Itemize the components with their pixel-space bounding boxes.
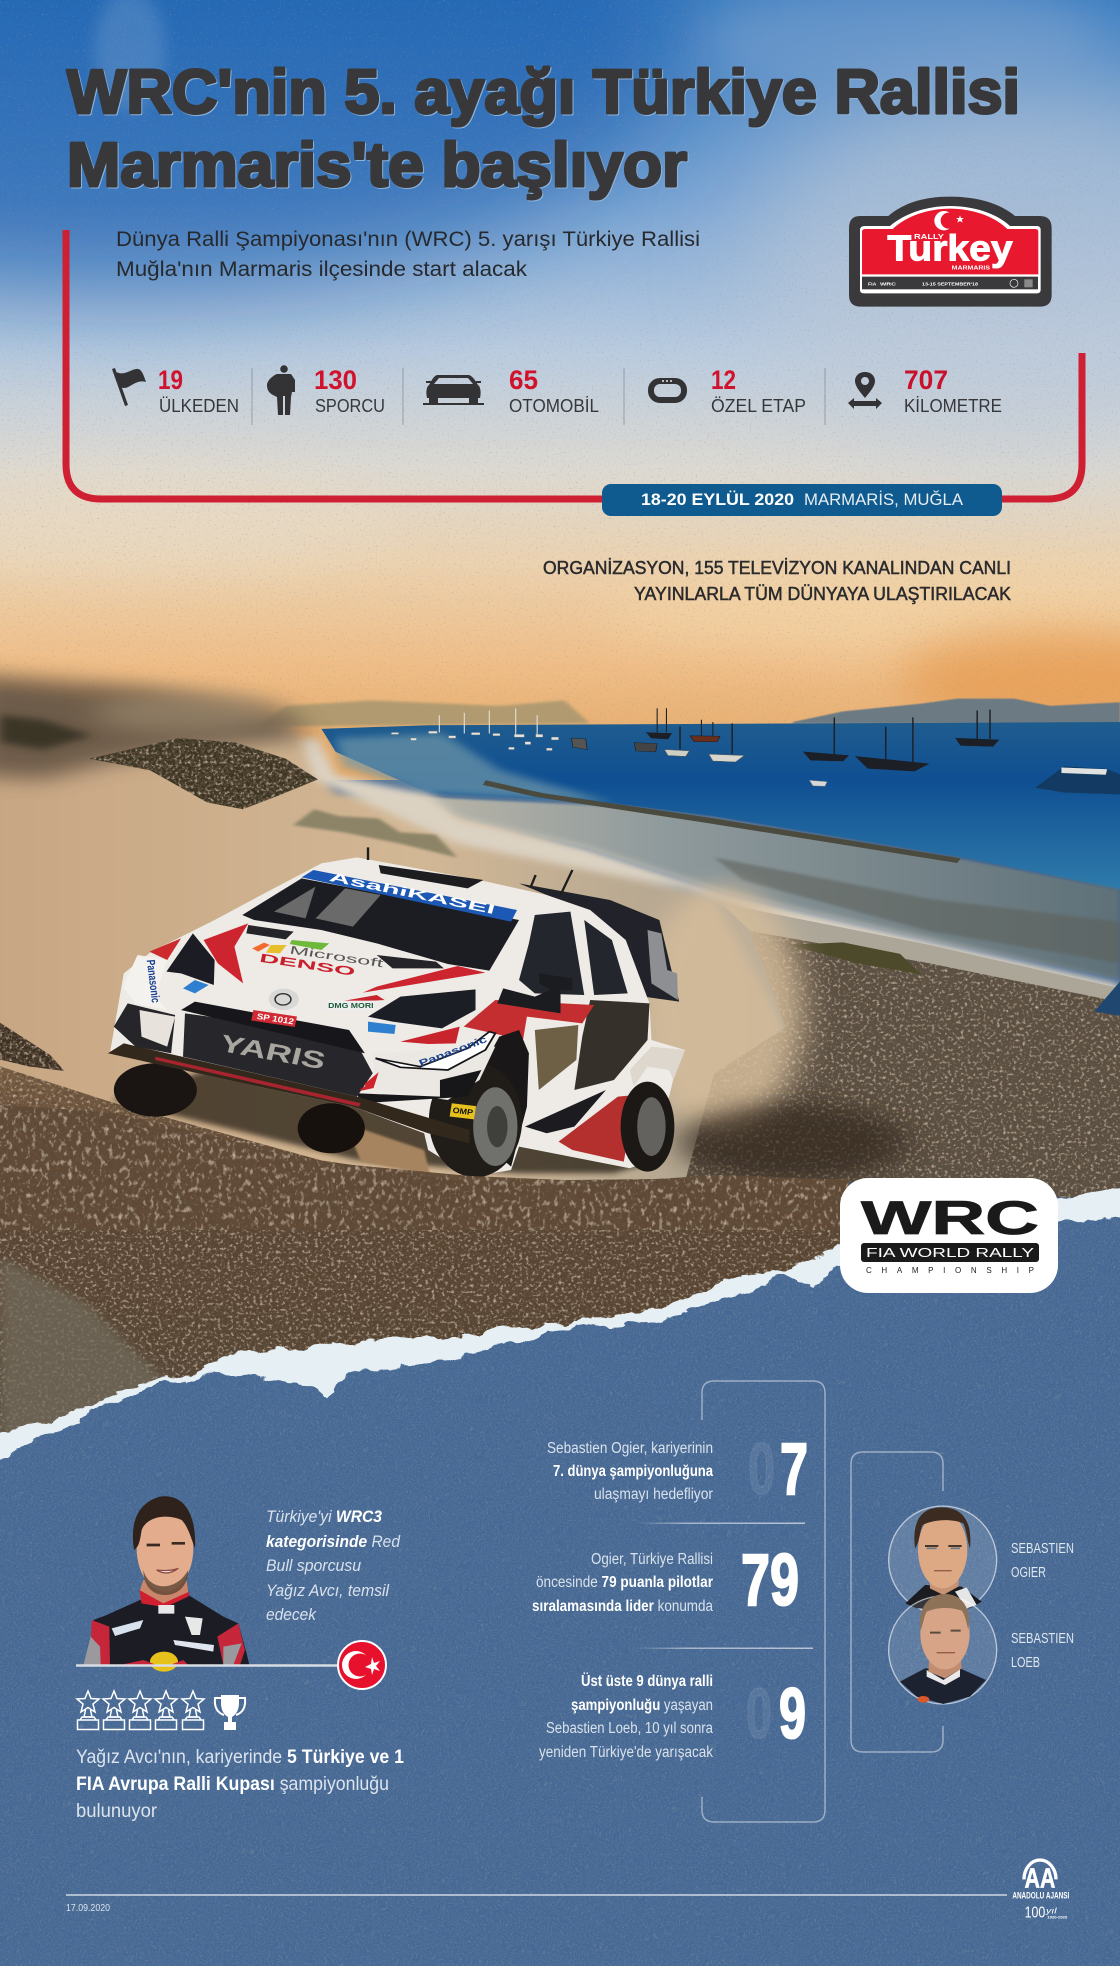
stat: 12 özel etap: 12: [711, 365, 736, 395]
OMP: OMP: [452, 1106, 474, 1117]
footer rule: [66, 1894, 1007, 1896]
Avcı career text: FIA Avrupa Ralli Kupası şampiyonluğu: [76, 1774, 389, 1795]
stat: 19 ülkeden: ÜLKEDEN: [159, 396, 239, 416]
red side sill: [559, 1095, 636, 1162]
background: sunset sky: [0, 0, 1120, 780]
far-side wheel: [298, 1103, 365, 1153]
block: 7 titles: [547, 1440, 713, 1503]
toyota badge: [269, 989, 299, 1010]
blue sponsor chips: [183, 980, 396, 1034]
bonnet vents: [246, 925, 444, 968]
stat: 12 özel etap: ÖZEL ETAP: [711, 396, 806, 416]
block: 9 titles: [539, 1673, 713, 1761]
light pebbles: [721, 903, 1120, 1002]
stat: 130 sporcu: SPORCU: [315, 396, 385, 416]
roof scoop: [379, 865, 483, 888]
stat: 707 kilometre: 707: [904, 365, 948, 395]
dust puffs: [93, 692, 279, 733]
logo: Rally Turkey plate: MARMARIS: [952, 265, 990, 271]
Avcı text: Bull sporcusu: [266, 1556, 361, 1575]
block: 79 points: sıralamasında lider konumda: [532, 1598, 713, 1615]
front-right wheel: [429, 1063, 522, 1177]
driver names: LOEB: [1011, 1654, 1040, 1671]
rim centre: [487, 1106, 508, 1147]
stat: 65 otomobil: OTOMOBİL: [509, 396, 599, 416]
photo: coastline, sea and boats: [0, 674, 1120, 1487]
portrait baseline: [76, 1664, 345, 1667]
foreground dirt slope: [0, 1066, 846, 1487]
left headlight: [166, 933, 215, 985]
red triangle: [329, 995, 385, 1003]
Avcı career text: Yağız Avcı'nın, kariyerinde 5 Türkiye ve 1: [76, 1747, 404, 1768]
lower door black: [525, 1090, 606, 1133]
windshield light reflection: [274, 887, 381, 927]
grey rock low-left: [0, 1257, 164, 1441]
DENSO: DENSO: [258, 951, 357, 979]
portrait: Sebastien Ogier: [889, 1506, 997, 1614]
block: 9 titles: yeniden Türkiye'de yarışacak: [539, 1744, 713, 1761]
drivers panel frame: [851, 1452, 943, 1752]
block: 7 titles: 7. dünya şampiyonluğuna: [553, 1463, 713, 1480]
splitter red line: [155, 1057, 361, 1107]
icon: flag: [112, 368, 146, 406]
number 09: [746, 1675, 806, 1754]
icons: five small trophies: [77, 1691, 204, 1730]
lower bumper black inlet: [357, 1070, 481, 1103]
stat: 707 kilometre: KİLOMETRE: [904, 396, 1002, 416]
driver names: OGIER: [1011, 1564, 1046, 1581]
right gravel slope: [686, 931, 1120, 1200]
stat: 12 özel etap: [711, 365, 806, 416]
left fender panel: [123, 955, 167, 1010]
DMG MORI: DMG MORI: [328, 1002, 374, 1010]
stats row: [112, 365, 1002, 425]
left rock: [0, 1023, 64, 1071]
red stripe by fender: [149, 938, 181, 960]
grass patch: [789, 942, 921, 975]
number 09: 0: [746, 1675, 772, 1754]
Avcı text: Yağız Avcı, temsil: [266, 1581, 390, 1600]
subtitle: Muğla'nın Marmaris ilçesinde start alacak: [116, 258, 528, 281]
left wing white: [140, 1010, 175, 1047]
door red band: [464, 1000, 594, 1040]
logo: Rally Turkey plate: 13-15 SEPTEMBER'18: [922, 282, 978, 288]
torn paper edge white: [0, 1183, 1120, 1500]
icon: big trophy: [215, 1695, 245, 1730]
lit dirt between wheels: [345, 1123, 430, 1175]
Panasonic right panel: [376, 1032, 495, 1070]
broadcast note: ORGANİZASYON, 155 TELEVİZYON KANALINDAN CANLI: [543, 558, 1011, 578]
windshield: [242, 878, 519, 971]
shallow water and rocky shore: [421, 797, 1120, 979]
logo: Anadolu Ajansı: 100: [1025, 1904, 1045, 1921]
Avcı career text: bulunuyor: [76, 1801, 158, 1822]
driver names: [1011, 1540, 1074, 1671]
block: 9 titles: Sebastien Loeb, 10 yıl sonra: [546, 1720, 713, 1737]
antennas: [368, 847, 572, 895]
left headland: [257, 700, 590, 727]
Avcı career text: [76, 1747, 404, 1822]
logo: Anadolu Ajansı: ANADOLU AJANSI: [1012, 1891, 1069, 1901]
title: Marmaris'te başlıyor: [67, 131, 687, 200]
block: 79 points: Ogier, Türkiye Rallisi: [591, 1551, 713, 1568]
blue lower panel: [0, 1212, 1120, 1966]
Panasonic left: Panasonic: [143, 959, 162, 1003]
rally car: [108, 847, 685, 1177]
red stripe bonnet left: [204, 923, 248, 983]
stat: 130 sporcu: 130: [314, 365, 357, 395]
date pill: [602, 484, 1002, 516]
Microsoft: Microsoft: [288, 943, 385, 970]
rim: [473, 1087, 517, 1166]
red frame: [66, 230, 1082, 499]
block: 7 titles: ulaşmayı hedefliyor: [594, 1486, 713, 1503]
logo: Anadolu Ajansı: yıl: [1045, 1906, 1057, 1915]
toyota badge inner: [275, 994, 291, 1005]
plate: SP 1012: [256, 1012, 295, 1026]
shore boulders: [293, 809, 457, 857]
stat: 19 ülkeden: 19: [158, 365, 183, 395]
icon: car: [423, 375, 484, 405]
side windows: [519, 912, 628, 995]
upper grille strip: [181, 1002, 365, 1053]
far mountains: [793, 699, 1120, 723]
portrait: Sebastien Loeb: [889, 1594, 997, 1704]
Avcı text: [266, 1507, 400, 1624]
driver names: SEBASTIEN: [1011, 1540, 1074, 1557]
date pill: 18-20 EYLÜL 2020: [641, 490, 794, 509]
logo: Rally Turkey plate: Turkey: [887, 228, 1013, 269]
YARIS: YARIS: [217, 1029, 328, 1075]
rear rim: [637, 1097, 666, 1156]
logo: Rally Turkey plate: WRC: [880, 282, 897, 288]
microsoft logo squares: [252, 943, 287, 953]
bonnet sponsor green: [290, 940, 329, 950]
block: 9 titles: Üst üste 9 dünya ralli: [581, 1673, 713, 1690]
door dirt: [535, 1025, 578, 1090]
date pill: MARMARİS, MUĞLA: [804, 490, 964, 509]
left front wheel: [114, 1063, 197, 1117]
logo: Anadolu Ajansı: AA: [1025, 1863, 1056, 1894]
broadcast note: YAYINLARLA TÜM DÜNYAYA ULAŞTIRILACAK: [634, 584, 1011, 604]
driver names: SEBASTIEN: [1011, 1630, 1074, 1647]
Avcı text: Türkiye'yi WRC3: [266, 1507, 382, 1526]
block: 79 points: öncesinde 79 puanla pilotlar: [536, 1574, 713, 1591]
logo: Rally Turkey plate: [849, 197, 1052, 307]
dark dust top-left: [0, 674, 307, 779]
number 79: 79: [741, 1540, 799, 1621]
rear arch white: [630, 1047, 685, 1087]
pale water near beach: [336, 733, 614, 803]
OMP: [450, 1103, 476, 1119]
vegetation shadow: [0, 715, 93, 750]
splitter: [108, 1043, 470, 1143]
flag: Türkiye: [338, 1641, 386, 1689]
number 07: 7: [780, 1429, 808, 1510]
red arrow: [361, 1075, 377, 1090]
portrait: Yağız Avcı: [83, 1496, 249, 1672]
icon: track: [651, 381, 684, 400]
blue object at right edge: [1094, 981, 1120, 1016]
date: 17.09.2020: [66, 1903, 110, 1914]
dust cloud right of car: [639, 885, 804, 1133]
lower bumper white: [373, 1047, 495, 1100]
mirror: [497, 973, 572, 1013]
logo: Anadolu Ajansı: [1012, 1860, 1069, 1921]
Panasonic right: Panasonic: [417, 1035, 490, 1069]
wing endplate: [647, 930, 678, 1000]
logo: WRC: WRC: [861, 1191, 1039, 1244]
stats panel frame: [702, 1381, 825, 1822]
subtitle: [116, 228, 700, 281]
number 07: [748, 1429, 808, 1510]
stat: 65 otomobil: [509, 365, 599, 416]
front wheel arch: [479, 1030, 529, 1167]
stat: 65 otomobil: 65: [509, 365, 538, 395]
Avcı text: edecek: [266, 1605, 317, 1624]
title: [67, 58, 1020, 200]
logo: Rally Turkey plate: RALLY: [914, 232, 944, 241]
right headlight: [368, 989, 476, 1028]
Avcı text: kategorisinde Red: [266, 1532, 400, 1551]
number 07: 0: [748, 1429, 775, 1510]
dust base: [0, 688, 786, 1404]
gravel shore rocks: [714, 857, 1120, 963]
shore rock line: [483, 780, 961, 863]
icon: distance pin: [848, 372, 882, 409]
block: 7 titles: Sebastien Ogier, kariyerinin: [547, 1440, 713, 1457]
rear wheel: [621, 1082, 674, 1172]
icon: driver: [267, 365, 295, 415]
block: 79 points: [532, 1551, 713, 1615]
left wing black: [114, 1003, 175, 1053]
roof banner: [302, 870, 517, 922]
banner text: AsahiKASEI: [328, 869, 497, 917]
stat: 130 sporcu: [314, 365, 385, 416]
flying dirt: [679, 1103, 907, 1181]
hillside vegetation: [89, 738, 318, 809]
logo: WRC: FIA WORLD RALLY: [866, 1245, 1034, 1260]
door dark panels: [574, 1000, 649, 1090]
title: WRC'nin 5. ayağı Türkiye Rallisi: [67, 58, 1020, 127]
number 09: 9: [779, 1675, 806, 1754]
front dirt lip over wheels: [0, 1105, 850, 1230]
sand beach: [300, 738, 1120, 1004]
ground shadow under car: [112, 1067, 661, 1173]
rear wing: [519, 883, 679, 1002]
logo: Rally Turkey plate: FIA: [868, 282, 877, 288]
logo: Anadolu Ajansı: 1920-2020: [1047, 1916, 1068, 1920]
sea: [321, 722, 1120, 890]
stat: 707 kilometre: [904, 365, 1002, 416]
broadcast note: [543, 558, 1011, 604]
front grille: [183, 1013, 373, 1097]
block: 9 titles: şampiyonluğu yaşayan: [571, 1697, 713, 1714]
stat: 19 ülkeden: [158, 365, 239, 416]
boats: [391, 708, 1120, 794]
red bonnet stripe right: [363, 966, 485, 993]
logo: WRC: CHAMPIONSHIP: [866, 1266, 1034, 1275]
logo: WRC: [840, 1178, 1058, 1293]
car body: [110, 857, 685, 1177]
lower red wedge: [400, 1027, 460, 1044]
subtitle: Dünya Ralli Şampiyonası'nın (WRC) 5. yarışı Türkiye Rallisi: [116, 228, 700, 251]
